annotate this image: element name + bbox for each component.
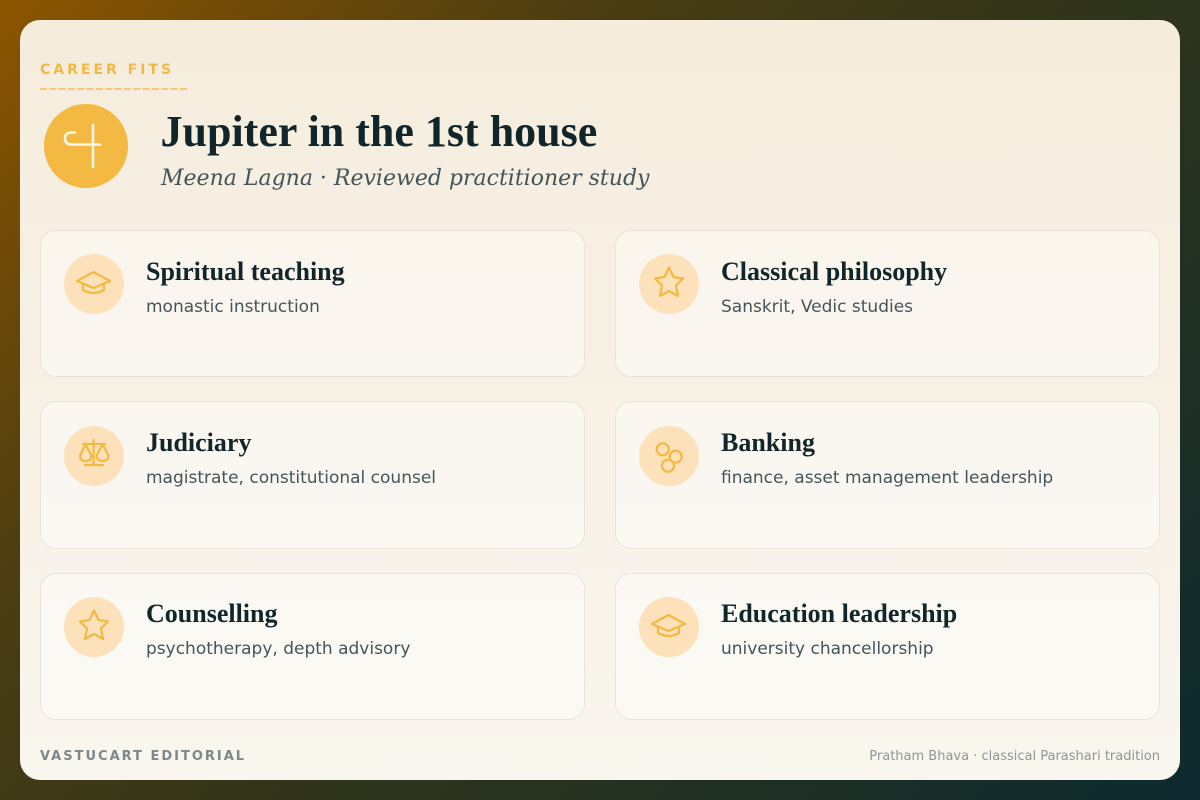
icon: graduation cap: [639, 597, 699, 657]
heading: Counselling: [146, 599, 278, 628]
description: Sanskrit, Vedic studies: [721, 297, 913, 317]
icon: star: [639, 254, 699, 314]
heading: Banking: [721, 428, 815, 457]
title: Jupiter in the 1st house: [160, 107, 597, 156]
heading: Classical philosophy: [721, 257, 947, 286]
icon: Jupiter glyph: [44, 104, 128, 188]
panel: Classical philosophy: [615, 230, 1160, 377]
description: monastic instruction: [146, 297, 320, 317]
icon: coins: [639, 426, 699, 486]
description: magistrate, constitutional counsel: [146, 468, 436, 488]
panel: Judiciary: [40, 401, 585, 549]
description: finance, asset management leadership: [721, 468, 1053, 488]
description: university chancellorship: [721, 639, 934, 659]
heading: Spiritual teaching: [146, 257, 345, 286]
icon: graduation cap: [64, 254, 124, 314]
eyebrow dashed rule: [40, 88, 187, 90]
panel: Education leadership: [615, 573, 1160, 720]
footer: brand: VASTUCART EDITORIAL: [40, 749, 246, 764]
panel: Spiritual teaching: [40, 230, 585, 377]
eyebrow label: CAREER FITS: [40, 62, 174, 78]
subtitle: Meena Lagna · Reviewed practitioner study: [161, 166, 649, 191]
icon: scales: [64, 426, 124, 486]
panel: Counselling: [40, 573, 585, 720]
footer: source: Pratham Bhava · classical Parashari tradition: [869, 749, 1160, 764]
heading: Judiciary: [146, 428, 251, 457]
heading: Education leadership: [721, 599, 957, 628]
icon: star: [64, 597, 124, 657]
panel: Banking: [615, 401, 1160, 549]
description: psychotherapy, depth advisory: [146, 639, 410, 659]
